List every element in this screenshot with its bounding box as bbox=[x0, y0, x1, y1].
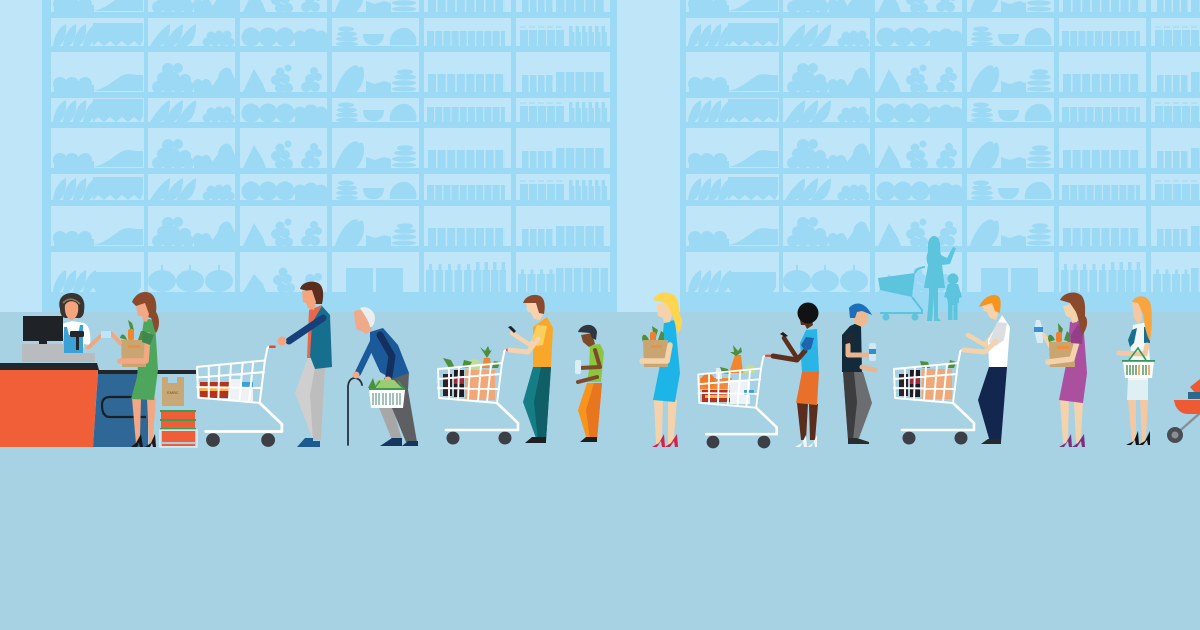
shirt bbox=[533, 317, 553, 367]
hair bbox=[798, 302, 818, 324]
skirt bbox=[1127, 378, 1148, 400]
front arm bbox=[358, 342, 373, 373]
dress bbox=[131, 319, 158, 400]
light trouser leg bbox=[378, 405, 402, 440]
legs bbox=[132, 398, 156, 444]
cart 1 bbox=[197, 347, 282, 447]
heels bbox=[131, 434, 156, 447]
floor bbox=[0, 312, 1200, 630]
cart contents bbox=[443, 346, 500, 400]
arm bbox=[579, 350, 600, 368]
cart frame bbox=[197, 347, 282, 447]
cart frame bbox=[438, 350, 518, 444]
hair bbox=[653, 293, 682, 334]
child in green vest bbox=[575, 325, 604, 442]
arm bbox=[773, 351, 805, 360]
cart contents bbox=[700, 345, 756, 404]
face bbox=[982, 300, 998, 320]
cashier bbox=[59, 293, 103, 354]
hand bbox=[384, 376, 392, 384]
heels bbox=[1059, 434, 1085, 447]
register base bbox=[22, 344, 95, 362]
card reader bbox=[70, 331, 84, 337]
counter: orange front bbox=[0, 370, 98, 447]
arm back bbox=[512, 333, 538, 345]
packing bag and stacked goods bbox=[160, 377, 197, 447]
shoes bbox=[848, 438, 869, 444]
cashier shirt bbox=[62, 321, 90, 354]
jacket bbox=[310, 306, 332, 369]
shoes bbox=[297, 438, 320, 447]
heels bbox=[652, 434, 678, 447]
elderly man with cane and basket bbox=[348, 307, 418, 446]
stroller item bbox=[1188, 392, 1200, 399]
sleeve bbox=[989, 322, 1007, 346]
skirt bbox=[796, 372, 819, 405]
trousers bbox=[978, 367, 1007, 442]
top bbox=[800, 329, 819, 372]
face bbox=[852, 312, 868, 327]
phone bbox=[780, 332, 788, 337]
background shoppers silhouette bbox=[878, 236, 962, 321]
sleeve bbox=[1071, 324, 1083, 344]
shoes bbox=[981, 439, 1001, 444]
legs bbox=[1128, 400, 1148, 443]
face bbox=[1132, 298, 1142, 324]
shelving: right unit bbox=[680, 0, 1200, 312]
shirt bbox=[307, 305, 322, 358]
cashier headband bbox=[63, 299, 80, 304]
hair bbox=[578, 325, 597, 340]
monitor bbox=[23, 316, 63, 341]
bag with groceries bbox=[642, 326, 668, 367]
top bbox=[842, 323, 862, 372]
hair bbox=[300, 282, 323, 304]
back wall bbox=[0, 0, 1200, 312]
face bbox=[526, 298, 543, 320]
hair bbox=[849, 304, 872, 318]
phone bbox=[508, 326, 516, 333]
counter: blue base bbox=[93, 372, 148, 447]
checkout counter bbox=[0, 363, 196, 447]
dress bbox=[653, 320, 680, 402]
hair bbox=[1060, 293, 1087, 335]
white heels bbox=[795, 435, 817, 447]
legs bbox=[797, 403, 818, 440]
punk man with blue hair and water bbox=[842, 304, 876, 444]
legs bbox=[654, 400, 677, 444]
cashier hair bbox=[59, 293, 84, 318]
shoes bbox=[380, 438, 418, 446]
cart frame bbox=[894, 350, 974, 444]
front arm bbox=[964, 341, 996, 352]
top bbox=[1128, 322, 1150, 380]
hair bbox=[979, 295, 1001, 313]
cart 4 with produce bbox=[894, 350, 974, 444]
silhouette: child bbox=[944, 274, 962, 320]
legs bbox=[1060, 400, 1083, 443]
white hair bbox=[360, 307, 375, 327]
arm bbox=[642, 345, 670, 361]
basket bbox=[368, 378, 405, 408]
cart contents bbox=[200, 379, 253, 401]
shelving: left unit bbox=[42, 0, 617, 312]
lower arm bbox=[862, 367, 875, 370]
vest bbox=[587, 344, 604, 382]
arms bbox=[120, 335, 148, 361]
bag with groceries bbox=[1048, 323, 1075, 367]
woman in purple dress with groceries bbox=[1034, 293, 1087, 447]
arm upper bbox=[968, 332, 995, 345]
trousers bbox=[295, 357, 325, 440]
silhouette: woman bbox=[924, 236, 956, 321]
trousers bbox=[523, 367, 551, 441]
cashier apron bbox=[63, 325, 83, 353]
hair bbox=[132, 292, 159, 333]
front arm bbox=[510, 339, 538, 352]
cane bbox=[348, 378, 362, 445]
sleeves bbox=[1128, 328, 1137, 347]
face bbox=[656, 301, 672, 323]
cart 3 with produce bbox=[698, 345, 777, 448]
silhouette: shopping cart bbox=[878, 267, 925, 320]
sleeve bbox=[801, 337, 814, 351]
face bbox=[354, 310, 372, 334]
counter: black top bbox=[0, 363, 99, 370]
counter: handle bbox=[102, 397, 147, 417]
cashier face bbox=[65, 301, 78, 320]
face bbox=[581, 333, 595, 347]
arm tattoo bbox=[848, 345, 871, 355]
woman in blue dress with groceries bbox=[642, 293, 682, 447]
sweater bbox=[370, 328, 409, 379]
arm bbox=[1048, 342, 1077, 362]
back arm bbox=[380, 335, 392, 376]
stroller wheel bbox=[1167, 427, 1183, 443]
trousers bbox=[578, 383, 602, 440]
stroller seat bbox=[1174, 400, 1200, 414]
woman in pale skirt with basket bbox=[1119, 296, 1155, 445]
water bottle bbox=[869, 343, 876, 361]
bag with groceries bbox=[120, 320, 146, 367]
stroller frame bbox=[1175, 413, 1200, 435]
dress bbox=[1059, 320, 1087, 403]
stroller hood bbox=[1190, 379, 1200, 397]
man in teal jacket bbox=[278, 282, 332, 447]
cart frame bbox=[698, 356, 777, 448]
face bbox=[1063, 303, 1079, 323]
stacked groceries bbox=[160, 410, 197, 447]
hair bbox=[1132, 296, 1152, 341]
shoes bbox=[580, 437, 597, 442]
stroller bbox=[1167, 379, 1200, 443]
cart contents bbox=[899, 360, 956, 399]
man in white shirt bbox=[964, 295, 1010, 444]
shoes bbox=[525, 437, 546, 443]
face bbox=[302, 290, 316, 310]
water bottle bbox=[575, 360, 581, 374]
woman in orange skirt with phone bbox=[773, 302, 819, 447]
customer at till: woman in green dress bbox=[101, 292, 159, 447]
face bbox=[136, 303, 149, 322]
heels bbox=[1126, 431, 1150, 445]
payment card bbox=[101, 331, 111, 338]
shopping bag: EMBC bbox=[167, 390, 179, 395]
trousers bbox=[843, 372, 872, 438]
face bbox=[799, 310, 813, 329]
water bottle bbox=[1034, 320, 1043, 343]
dark trouser leg bbox=[384, 373, 417, 442]
arm bbox=[1119, 345, 1147, 354]
man in orange shirt with phone bbox=[508, 295, 553, 443]
hair bbox=[523, 295, 545, 314]
cart 2 with produce bbox=[438, 346, 518, 444]
hand bbox=[278, 336, 286, 346]
arm with bottle bbox=[1044, 335, 1050, 346]
cashier arm bbox=[85, 334, 103, 349]
cash register bbox=[22, 316, 95, 362]
arm bbox=[289, 318, 323, 341]
counter: conveyor rail bbox=[98, 370, 196, 374]
basket bbox=[1122, 348, 1155, 378]
shirt bbox=[988, 315, 1010, 367]
